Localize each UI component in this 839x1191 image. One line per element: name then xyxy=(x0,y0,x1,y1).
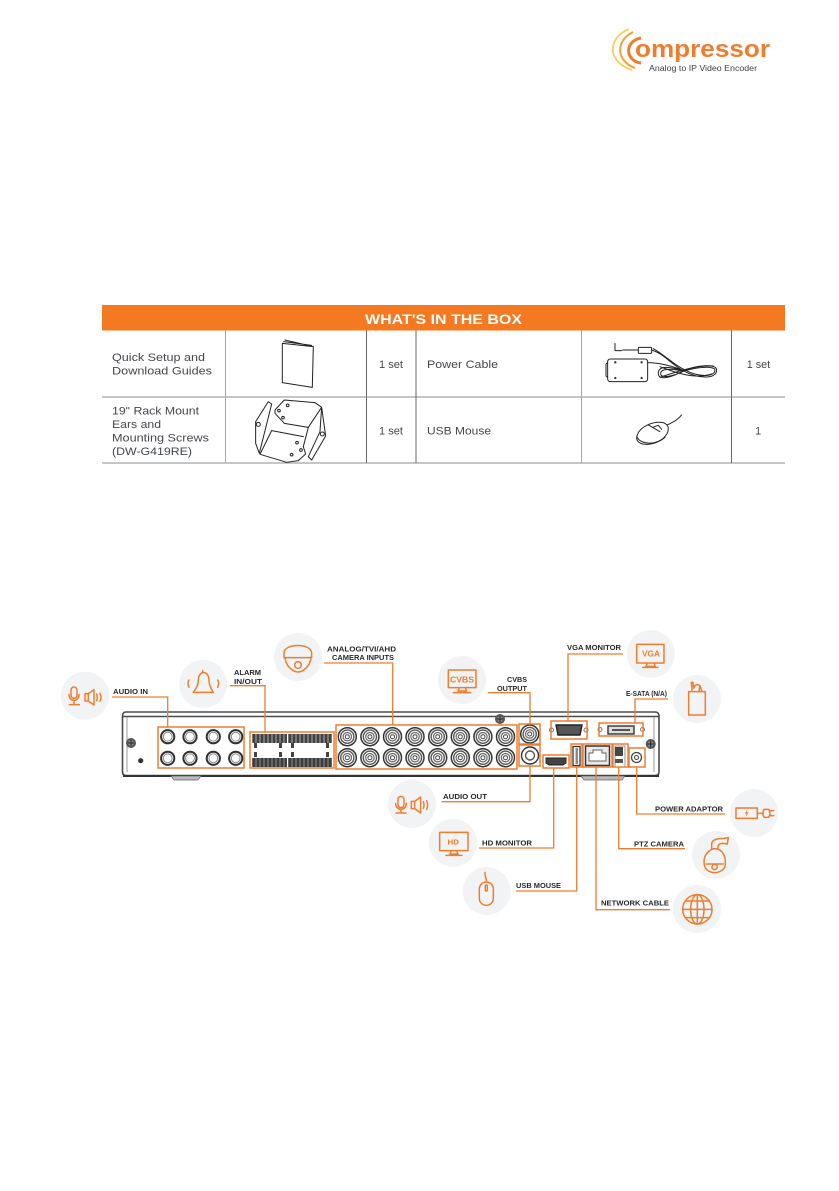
callout: usb mouse: USB MOUSE xyxy=(516,881,561,890)
row 2 left: rack mount ears: (DW-G419RE) xyxy=(112,446,192,458)
callout: power adaptor: POWER ADAPTOR xyxy=(655,805,724,814)
callout: usb mouse xyxy=(463,767,577,915)
network connector xyxy=(586,746,610,766)
alarm terminals xyxy=(252,733,332,767)
row 2 left: rack mount ears: Mounting Screws xyxy=(112,432,209,444)
vga connector xyxy=(550,725,588,735)
row 2 left: rack mount ears: 19" Rack Mount xyxy=(112,405,200,417)
callout: vga monitor xyxy=(567,630,675,721)
row 1 left: quick setup guides xyxy=(112,352,404,378)
callout: cvbs output: OUTPUT xyxy=(497,684,527,693)
row 2 left: rack mount ears xyxy=(112,405,404,458)
table header: WHAT'S IN THE BOX xyxy=(365,311,523,327)
row 2 left: rack mount ears: 1 set xyxy=(379,426,404,438)
row 1 left: quick setup guides: 1 set xyxy=(379,359,404,371)
row 1 right: power cable: Power Cable xyxy=(427,359,498,371)
icon: booklet xyxy=(282,340,313,387)
callout: e-sata xyxy=(626,675,721,723)
callout: camera inputs: CAMERA INPUTS xyxy=(332,653,394,662)
callout: ptz camera: PTZ CAMERA xyxy=(634,840,685,849)
logo: Compressor: ompressor xyxy=(635,36,770,63)
callout: vga monitor: VGA MONITOR xyxy=(567,643,622,652)
table header xyxy=(102,305,785,330)
callout: alarm in/out xyxy=(179,660,265,732)
logo: Compressor: Analog to IP Video Encoder xyxy=(649,64,757,73)
callout: cvbs output: CVBS xyxy=(450,676,475,684)
callout: hd monitor xyxy=(429,768,554,867)
icon: mouse xyxy=(637,415,682,444)
camera input connectors xyxy=(338,728,514,767)
hdmi connector xyxy=(546,758,566,765)
callout: vga monitor: VGA xyxy=(642,648,660,658)
callout: alarm in/out: IN/OUT xyxy=(234,677,263,686)
callout: audio out xyxy=(388,766,530,828)
callout: power adaptor xyxy=(637,767,778,837)
power connector xyxy=(632,752,642,762)
callout: camera inputs: ANALOG/TVI/AHD xyxy=(327,645,397,654)
device rear panel xyxy=(122,712,659,780)
callout: ptz camera xyxy=(619,767,740,879)
cvbs connector xyxy=(521,725,539,743)
ptz connector xyxy=(615,746,625,767)
callout: audio in: AUDIO IN xyxy=(113,687,148,696)
row 1 right: power cable xyxy=(427,359,771,371)
callout: hd monitor: HD xyxy=(448,838,460,846)
icon: power adapter and cable xyxy=(606,343,717,382)
row 2 right: usb mouse: USB Mouse xyxy=(427,426,491,438)
row 2 right: usb mouse: 1 xyxy=(755,426,761,438)
row 1 right: power cable: 1 set xyxy=(747,359,771,371)
callout: cvbs output: CVBS xyxy=(507,675,527,684)
esata connector xyxy=(598,726,644,734)
callout: audio in xyxy=(61,672,168,727)
callout: camera inputs xyxy=(274,633,397,725)
callout: hd monitor: HD MONITOR xyxy=(482,839,533,848)
row 2 left: rack mount ears: Ears and xyxy=(112,419,161,431)
callout: network cable: NETWORK CABLE xyxy=(601,899,669,908)
icon: rack mount ears xyxy=(256,400,326,462)
row 1 left: quick setup guides: Quick Setup and xyxy=(112,352,205,364)
callout: cvbs output xyxy=(438,656,530,724)
audio out connector xyxy=(522,747,538,764)
audio in connectors xyxy=(161,730,242,765)
logo: Compressor xyxy=(613,29,770,73)
callout: network cable xyxy=(596,767,721,933)
row 2 right: usb mouse xyxy=(427,426,761,438)
callout: alarm in/out: ALARM xyxy=(234,668,261,677)
orange highlight boxes xyxy=(158,721,645,769)
row 1 left: quick setup guides: Download Guides xyxy=(112,366,212,378)
usb connector xyxy=(573,746,580,766)
table: what's in the box xyxy=(102,305,785,463)
callout: e-sata: E-SATA (N/A) xyxy=(626,689,667,698)
callout: audio out: AUDIO OUT xyxy=(443,792,488,801)
